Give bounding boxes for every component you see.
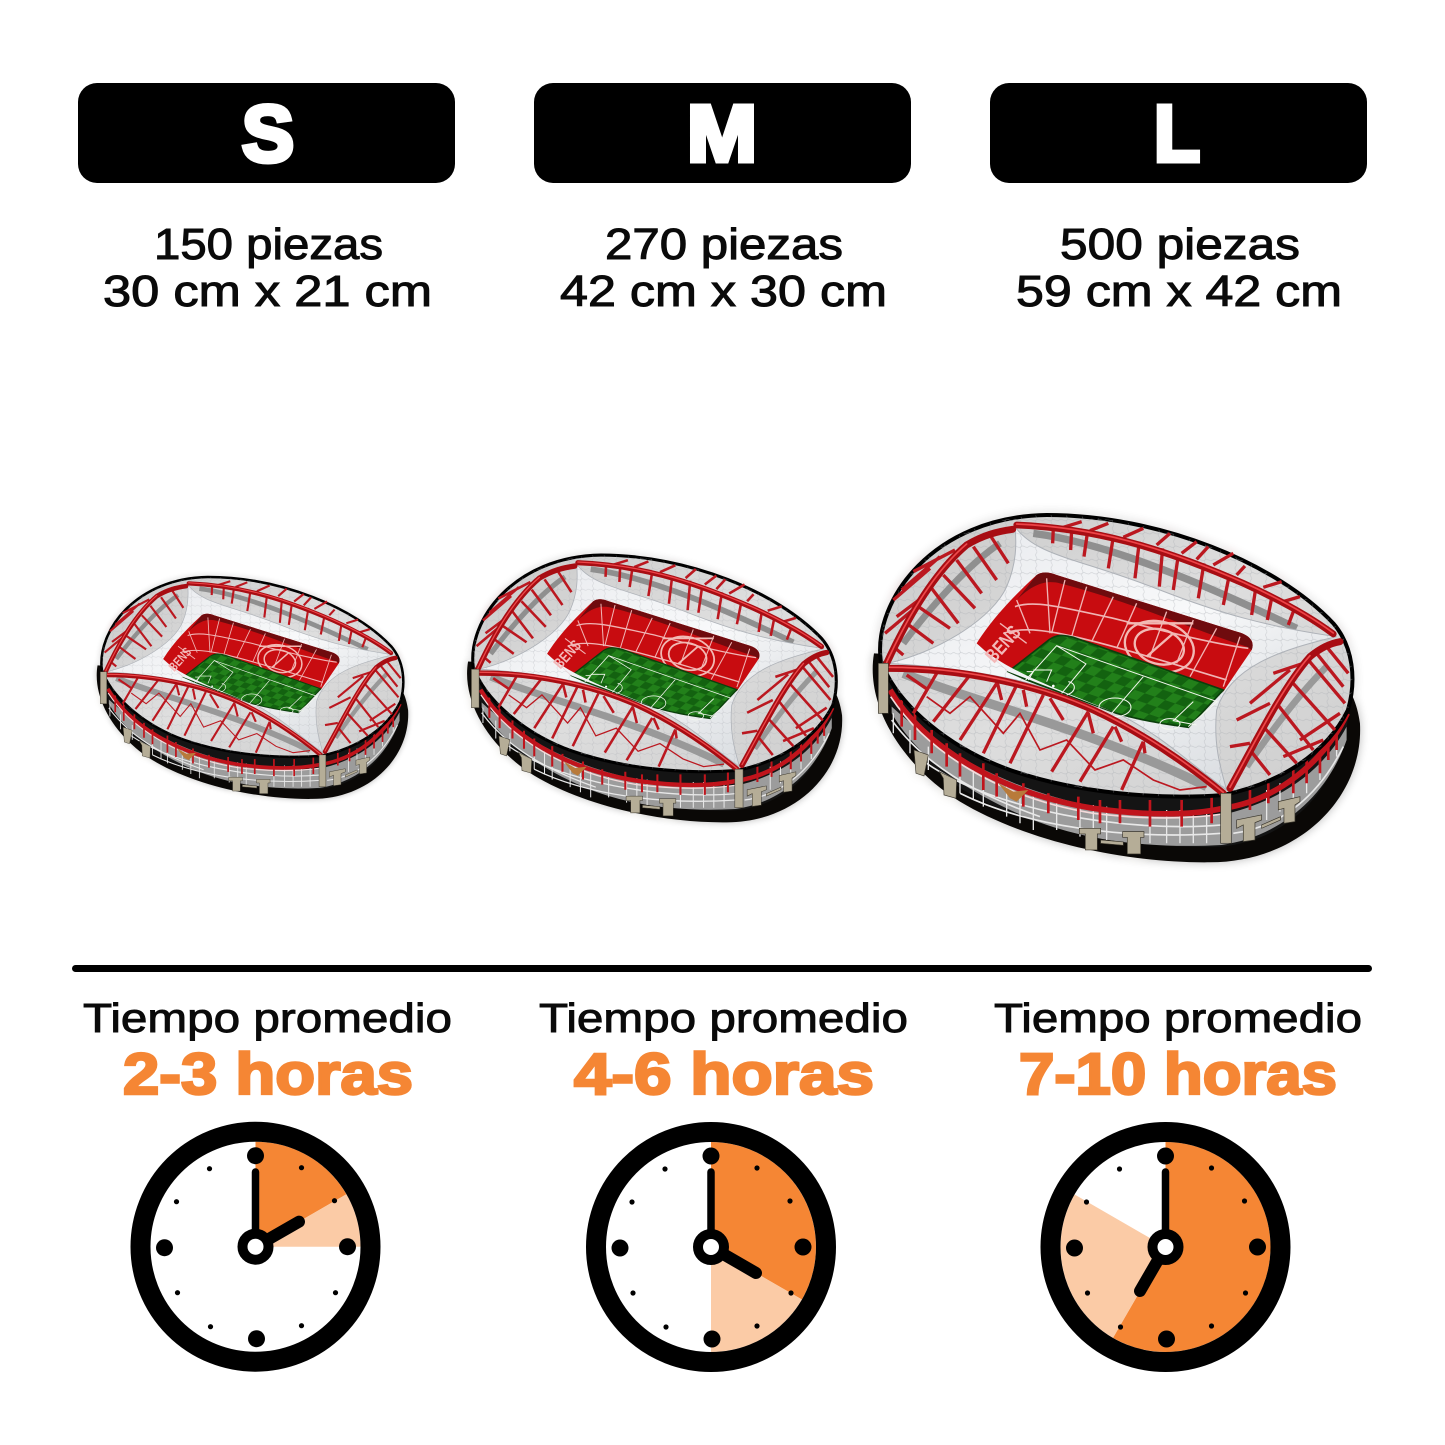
time label M: Tiempo promedio — [539, 995, 908, 1041]
pieces and dimensions L: 59 cm x 42 cm — [1016, 267, 1342, 316]
clock L: 7-10 hours — [1050, 1132, 1280, 1362]
size badge S: S — [242, 89, 294, 178]
column L header — [990, 83, 1367, 316]
time label L: 7-10 horas — [1019, 1042, 1337, 1107]
clock M: 4-6 hours — [596, 1132, 826, 1362]
pieces and dimensions S — [103, 220, 432, 316]
time label S: 2-3 horas — [123, 1042, 413, 1107]
stadium puzzle S — [97, 577, 408, 799]
stadium puzzle L: BENS — [981, 622, 1026, 667]
stadium puzzle M: BENS — [551, 637, 585, 672]
pieces and dimensions S: 30 cm x 21 cm — [103, 267, 432, 316]
pieces and dimensions M: 42 cm x 30 cm — [560, 267, 887, 316]
stadium puzzle L — [873, 515, 1360, 862]
pieces and dimensions M: 270 piezas — [605, 220, 843, 269]
time label S: Tiempo promedio — [83, 995, 452, 1041]
size badge L: L — [1154, 89, 1200, 178]
size badge M: M — [687, 89, 757, 178]
size badge L — [990, 83, 1367, 183]
column S header — [78, 83, 455, 316]
pieces and dimensions M — [560, 220, 887, 316]
stadium puzzle M — [467, 555, 842, 822]
clock S: 2-3 hours — [140, 1132, 370, 1362]
column M header — [534, 83, 911, 316]
pieces and dimensions L: 500 piezas — [1060, 220, 1300, 269]
stadium puzzle S: BENS — [165, 644, 195, 674]
pieces and dimensions S: 150 piezas — [154, 220, 383, 269]
size badge M — [534, 83, 911, 183]
size badge S — [78, 83, 455, 183]
time label S — [83, 995, 452, 1107]
time label L — [994, 995, 1362, 1107]
time label L: Tiempo promedio — [994, 995, 1362, 1041]
time label M — [539, 995, 908, 1107]
pieces and dimensions L — [1016, 220, 1342, 316]
divider line — [72, 965, 1372, 972]
time label M: 4-6 horas — [574, 1042, 874, 1107]
